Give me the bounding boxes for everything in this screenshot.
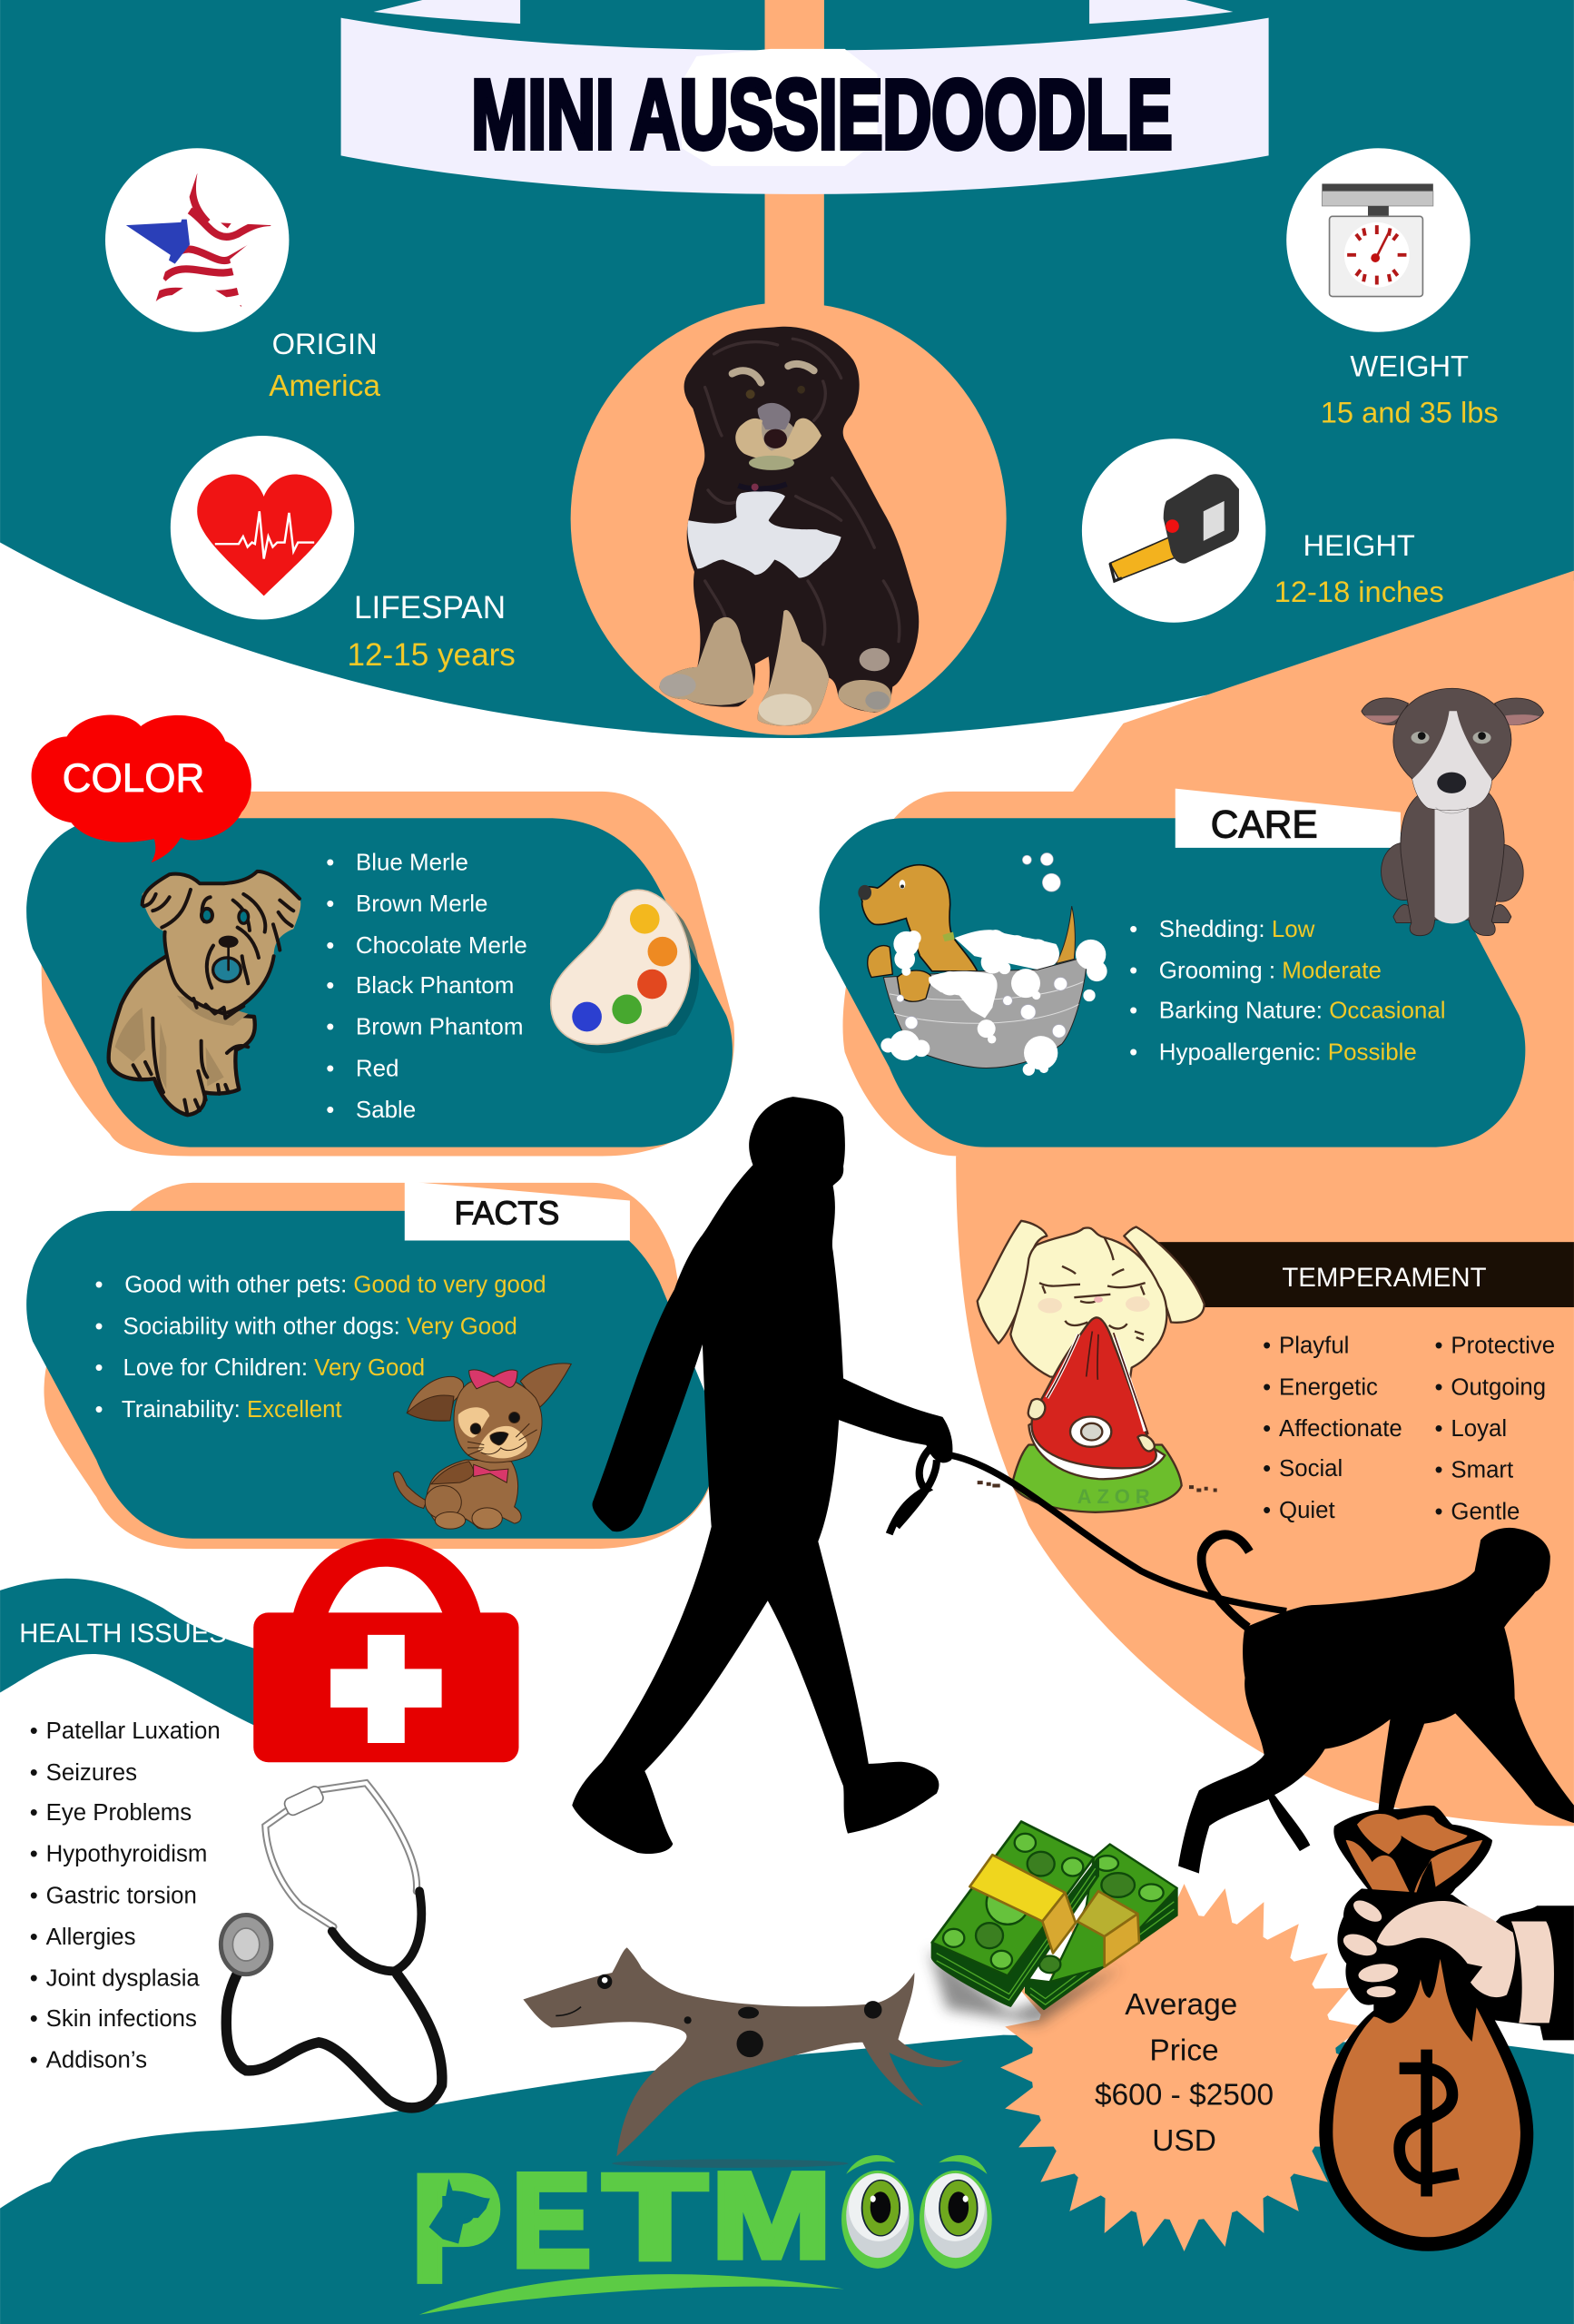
icon: stethoscope xyxy=(221,1783,442,2108)
text: lifespan: LIFESPAN xyxy=(354,590,506,625)
health list: Hypothyroidism xyxy=(46,1842,207,1867)
silhouette: woman walking a dog xyxy=(572,1097,1286,1854)
text: weight xyxy=(1321,350,1499,428)
text: height xyxy=(1274,528,1444,608)
temperament list: • xyxy=(1434,1334,1443,1359)
leash xyxy=(951,1455,1286,1611)
puppy face xyxy=(754,419,797,456)
color list: • xyxy=(326,933,334,959)
temperament list: Quiet xyxy=(1279,1498,1335,1523)
temperament list: • xyxy=(1434,1374,1443,1400)
panel: facts xyxy=(26,1211,716,1539)
icon: money bag with hand xyxy=(1319,1806,1574,2251)
icon: first aid kit xyxy=(253,1539,518,1762)
care list: • xyxy=(1129,1039,1137,1065)
health list xyxy=(30,1718,221,2073)
color list: • xyxy=(326,850,334,875)
health list: Seizures xyxy=(46,1760,137,1786)
health list: Gastric torsion xyxy=(46,1883,197,1908)
icon: weight scale xyxy=(1286,148,1471,332)
heading: temperament band: TEMPERAMENT xyxy=(1282,1263,1487,1293)
icon: measuring tape xyxy=(1082,438,1265,623)
facts list: • xyxy=(95,1397,103,1423)
color list: Chocolate Merle xyxy=(356,933,527,959)
icon: palette xyxy=(551,890,699,1053)
health list: Eye Problems xyxy=(46,1800,192,1826)
icon: stack of money xyxy=(929,1822,1177,2024)
bag knot xyxy=(1333,1806,1492,1914)
temperament list: • xyxy=(1263,1498,1271,1523)
title banner xyxy=(341,0,1269,194)
color list: • xyxy=(326,1098,334,1123)
temperament list: • xyxy=(1434,1458,1443,1483)
heading: facts tag xyxy=(405,1181,630,1241)
panel: bottom teal wave xyxy=(0,2035,1574,2324)
health list: • xyxy=(30,1800,38,1826)
temperament list xyxy=(1263,1334,1555,1524)
panel: color back xyxy=(42,792,734,1156)
icon: grey dog xyxy=(1362,688,1544,936)
color list: Brown Phantom xyxy=(356,1015,523,1040)
health list: • xyxy=(30,2006,38,2032)
color list xyxy=(326,850,527,1123)
facts list: Sociability with other dogs: Very Good xyxy=(123,1314,517,1339)
health list: • xyxy=(30,1925,38,1950)
panel: top teal header background xyxy=(0,0,1574,738)
panel: care xyxy=(820,818,1525,1147)
health list: • xyxy=(30,1760,38,1786)
icon: running spotted dog xyxy=(523,1947,963,2157)
text: origin xyxy=(269,327,380,403)
icon: origin star flag xyxy=(105,148,289,332)
color list: Blue Merle xyxy=(356,850,468,875)
health list: Joint dysplasia xyxy=(46,1966,200,1992)
text: average price: $600 - $2500 xyxy=(1095,2078,1274,2112)
facts list: Good with other pets: Good to very good xyxy=(124,1273,546,1298)
color list: Brown Merle xyxy=(356,891,487,917)
callout: color cloud xyxy=(32,715,251,862)
text: average price: Price xyxy=(1149,2034,1219,2067)
temperament list: Affectionate xyxy=(1279,1416,1402,1442)
dollar sign xyxy=(1400,2050,1459,2197)
care list: • xyxy=(1129,999,1137,1024)
logo letters: P xyxy=(410,2143,503,2314)
color list: • xyxy=(326,973,334,999)
health list: Patellar Luxation xyxy=(46,1718,221,1744)
silhouette: dog on leash xyxy=(1178,1528,1574,1874)
facts list: • xyxy=(95,1355,103,1381)
text: origin: America xyxy=(269,369,380,403)
logo letters: M xyxy=(712,2149,831,2284)
heading: health issues: HEALTH ISSUES xyxy=(19,1620,227,1649)
health list: • xyxy=(30,1883,38,1908)
care list: Hypoallergenic: Possible xyxy=(1159,1039,1417,1065)
panel: facts back xyxy=(44,1183,712,1549)
bag body xyxy=(1319,1948,1533,2251)
text: weight: 15 and 35 lbs xyxy=(1321,395,1499,428)
health list: Allergies xyxy=(46,1925,136,1950)
text: lifespan xyxy=(347,590,516,673)
icon: shaggy brown dog xyxy=(109,872,300,1115)
color list: • xyxy=(326,1015,334,1040)
logo letters: T xyxy=(604,2150,707,2285)
care list: Barking Nature: Occasional xyxy=(1159,999,1446,1024)
puppy fur highlights xyxy=(705,339,900,645)
color list: Black Phantom xyxy=(356,973,514,999)
icon: lifespan heart xyxy=(171,436,354,619)
puppy legs xyxy=(659,617,753,705)
temperament list: • xyxy=(1263,1456,1271,1482)
facts list: Love for Children: Very Good xyxy=(123,1355,425,1381)
color list: • xyxy=(326,1056,334,1081)
temperament list: Protective xyxy=(1451,1334,1555,1359)
care list xyxy=(1129,917,1446,1065)
temperament list: Social xyxy=(1279,1456,1343,1482)
panel: right peach background xyxy=(843,571,1574,1826)
heading: temperament band xyxy=(1156,1242,1574,1307)
temperament list: • xyxy=(1263,1374,1271,1400)
puppy chest xyxy=(687,491,841,578)
care list: Grooming : Moderate xyxy=(1159,959,1382,984)
temperament list: • xyxy=(1263,1334,1271,1359)
temperament list: Energetic xyxy=(1279,1374,1378,1400)
icon: brown puppy with bow xyxy=(393,1364,571,1529)
text: origin: ORIGIN xyxy=(272,327,378,360)
temperament list: • xyxy=(1263,1416,1271,1442)
image: puppy xyxy=(659,327,919,725)
temperament list: Smart xyxy=(1451,1458,1513,1483)
health list: • xyxy=(30,1966,38,1992)
text: average price xyxy=(1095,1988,1274,2158)
health list: • xyxy=(30,2048,38,2073)
care list: Shedding: Low xyxy=(1159,917,1315,942)
color list: Sable xyxy=(356,1098,416,1123)
text: average price: Average xyxy=(1125,1988,1237,2022)
starburst: price xyxy=(1000,1884,1368,2251)
facts list: • xyxy=(95,1273,103,1298)
temperament list: • xyxy=(1434,1416,1443,1442)
logo details xyxy=(419,2155,992,2315)
heading: facts tag: FACTS xyxy=(455,1195,559,1232)
care list: • xyxy=(1129,917,1137,942)
panel: color xyxy=(26,818,733,1147)
icon: dog in bath xyxy=(858,853,1107,1076)
title: MINI AUSSIEDOODLE xyxy=(471,59,1172,169)
health list: Addison’s xyxy=(46,2048,147,2073)
heading: care tag: CARE xyxy=(1211,803,1318,845)
health list: Skin infections xyxy=(46,2006,197,2032)
hand and sleeve xyxy=(1471,1905,1574,2040)
panel: health band xyxy=(0,1579,267,1731)
banner scraps at top xyxy=(373,0,1233,24)
text: weight: WEIGHT xyxy=(1350,350,1469,383)
care list: • xyxy=(1129,959,1137,984)
peach stem and circle behind puppy xyxy=(571,0,1007,735)
facts list: • xyxy=(95,1314,103,1339)
color list: Red xyxy=(356,1056,398,1081)
heading: care tag xyxy=(1176,789,1401,848)
text: average price: USD xyxy=(1152,2124,1216,2158)
temperament list: Loyal xyxy=(1451,1416,1507,1442)
facts list: Trainability: Excellent xyxy=(122,1397,342,1423)
text: height: HEIGHT xyxy=(1303,528,1415,562)
icon: bunny eating steak xyxy=(978,1221,1217,1512)
temperament list: • xyxy=(1434,1499,1443,1524)
color list: • xyxy=(326,891,334,917)
temperament list: Gentle xyxy=(1451,1499,1520,1524)
health list: • xyxy=(30,1842,38,1867)
logo letters: E xyxy=(511,2146,591,2295)
text: height: 12-18 inches xyxy=(1274,575,1444,608)
logo letters xyxy=(410,2143,831,2314)
icon: bunny eating steak: AZOR xyxy=(1077,1485,1150,1508)
logo: petmoo xyxy=(410,2143,992,2315)
temperament list: Playful xyxy=(1279,1334,1349,1359)
health list: • xyxy=(30,1718,38,1744)
facts list xyxy=(95,1273,546,1423)
callout: color cloud: COLOR xyxy=(63,756,204,801)
temperament list: Outgoing xyxy=(1451,1374,1546,1400)
text: lifespan: 12-15 years xyxy=(347,637,516,673)
